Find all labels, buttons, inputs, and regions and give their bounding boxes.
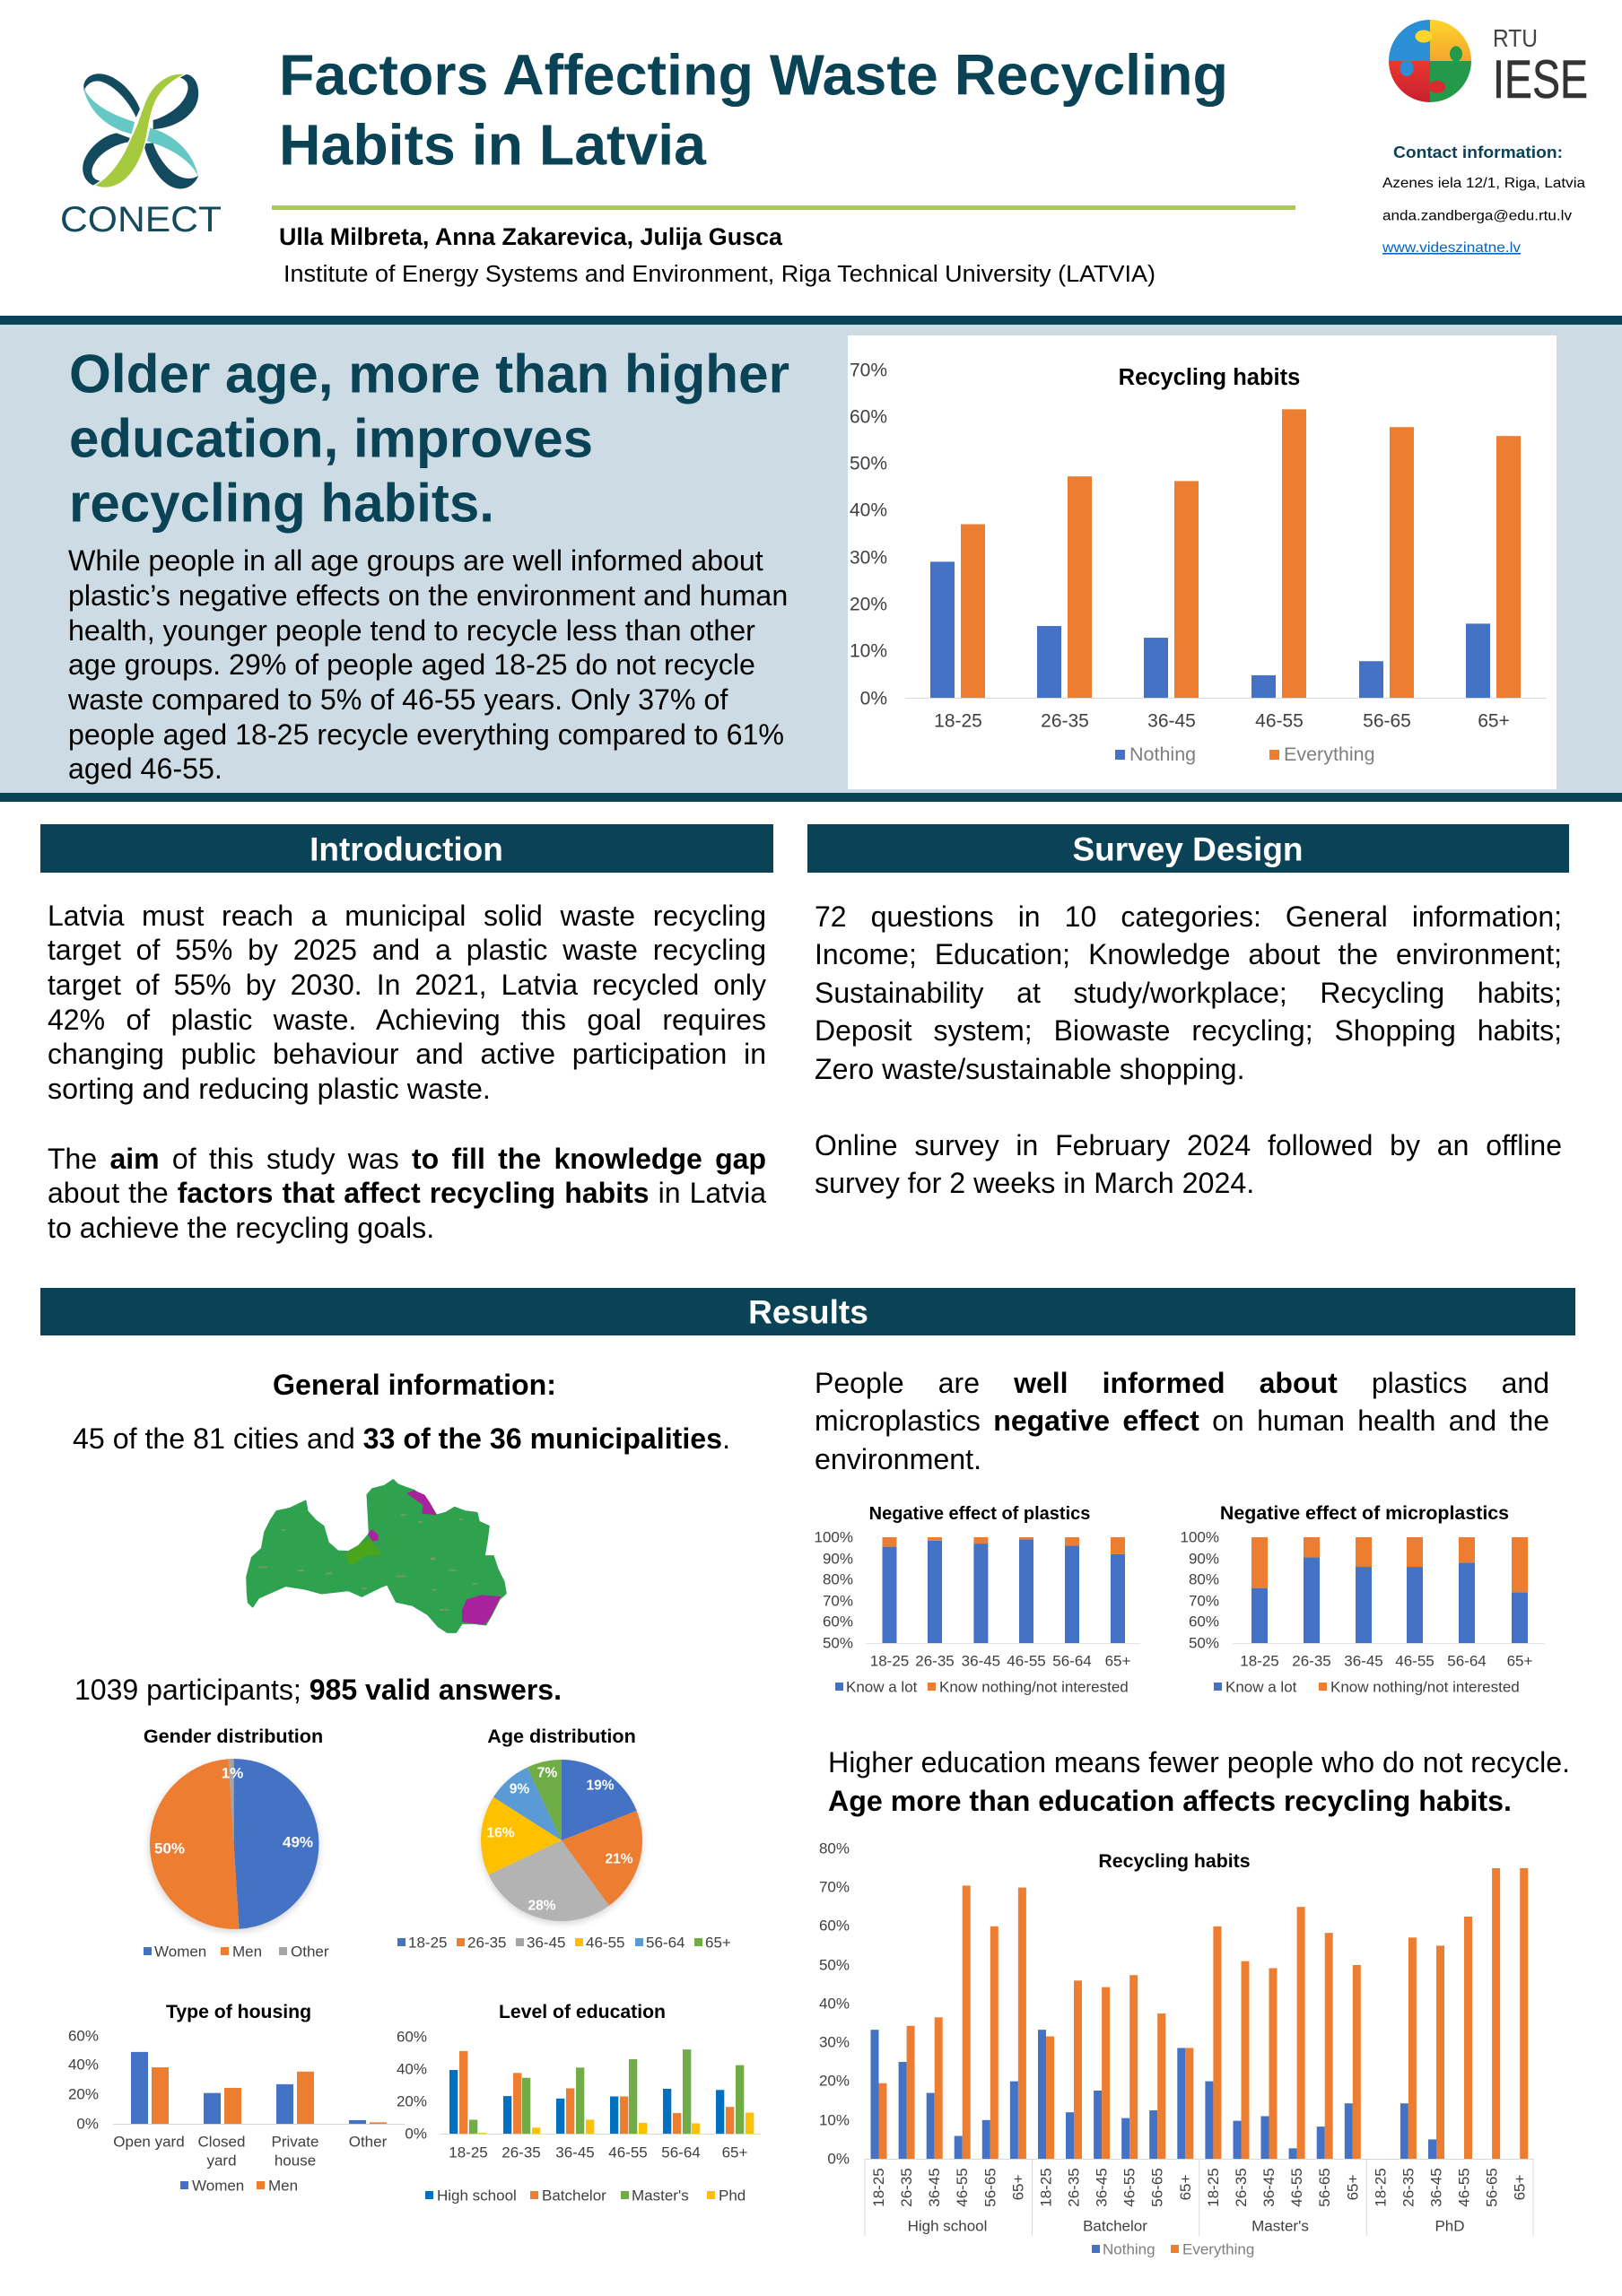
bar chart: recycling habits by education and age: 26-35 bbox=[898, 2168, 915, 2207]
bar chart: recycling habits by education and age: 18-25 bbox=[1372, 2168, 1389, 2207]
pie chart: age distribution: 21% bbox=[605, 1851, 633, 1867]
stacked bar chart: negative effect of plastics: Negative effect of plastics bbox=[869, 1504, 1090, 1524]
bar chart: type of housing: 20% bbox=[68, 2086, 99, 2102]
heading bar: Introduction bbox=[40, 824, 773, 873]
bar chart: recycling habits by education and age: 60% bbox=[819, 1918, 850, 1934]
bar chart: recycling habits by education and age: 56-65 bbox=[1484, 2168, 1501, 2207]
bar chart: recycling habits by education and age: 56-65 bbox=[1316, 2168, 1333, 2207]
awareness statement: microplastics negative effect on human health and the bbox=[815, 1405, 1549, 1437]
heading bar: Introduction: Introduction bbox=[310, 831, 503, 868]
stacked bar chart: negative effect of plastics: Know a lot bbox=[846, 1679, 918, 1695]
stacked bar chart: negative effect of plastics: 46-55 bbox=[1007, 1652, 1046, 1670]
map of Latvia bbox=[247, 1480, 506, 1632]
stacked bar chart: negative effect of plastics: 70% bbox=[823, 1593, 853, 1609]
CONECT logo: CONECT bbox=[60, 200, 222, 239]
bar chart: level of education: 36-45 bbox=[555, 2144, 595, 2161]
introduction paragraph one bbox=[48, 900, 766, 1105]
key finding body text: waste compared to 5% of 46-55 years. Only 37% of bbox=[68, 683, 728, 716]
bar chart: recycling habits by education and age bbox=[819, 1840, 1533, 2258]
key finding body text bbox=[68, 544, 788, 785]
participants statement: 1039 participants; 985 valid answers. bbox=[74, 1674, 562, 1706]
chart: recycling habits by age: Nothing bbox=[1129, 744, 1196, 765]
chart: recycling habits by age: 56-65 bbox=[1363, 710, 1411, 732]
bar chart: type of housing: Private bbox=[272, 2133, 318, 2151]
awareness statement: environment. bbox=[815, 1443, 981, 1475]
survey design categories: Sustainability at study/workplace; Recycling habits; bbox=[815, 977, 1562, 1009]
heading bar: Survey Design: Survey Design bbox=[1072, 831, 1304, 868]
education statement bbox=[828, 1746, 1570, 1817]
stacked bar chart: negative effect of plastics: 26-35 bbox=[915, 1652, 955, 1670]
stacked bar chart: negative effect of plastics: 36-45 bbox=[962, 1652, 1000, 1670]
chart: recycling habits by age: Everything bbox=[1284, 744, 1375, 765]
survey design timing: Online survey in February 2024 followed by an offline bbox=[815, 1129, 1562, 1161]
education statement: Higher education means fewer people who do not recycle. bbox=[828, 1746, 1570, 1779]
bar chart: recycling habits by education and age: 80% bbox=[819, 1840, 850, 1857]
pie chart: age distribution bbox=[397, 1725, 731, 1952]
bar chart: level of education bbox=[397, 2002, 761, 2205]
pie chart: gender distribution bbox=[144, 1725, 329, 1961]
bar chart: type of housing: Closed bbox=[198, 2133, 245, 2151]
bar chart: recycling habits by education and age: 40% bbox=[819, 1995, 850, 2013]
pie chart: age distribution: Age distribution bbox=[487, 1725, 636, 1747]
pie chart: age distribution: 36-45 bbox=[527, 1934, 565, 1952]
heading bar: Survey Design bbox=[807, 824, 1569, 873]
bar chart: recycling habits by education and age: 18-25 bbox=[1205, 2168, 1222, 2207]
chart: recycling habits by age: 60% bbox=[850, 407, 887, 427]
bar chart: recycling habits by education and age: 26-35 bbox=[1066, 2168, 1082, 2207]
chart: recycling habits by age: 70% bbox=[850, 361, 887, 380]
pie chart: age distribution: 7% bbox=[537, 1765, 557, 1781]
bar chart: level of education: Phd bbox=[719, 2187, 746, 2205]
introduction paragraph one: changing public behaviour and active participation in bbox=[48, 1038, 766, 1070]
introduction paragraph one: sorting and reducing plastic waste. bbox=[48, 1073, 491, 1105]
bar chart: type of housing: Men bbox=[268, 2178, 298, 2194]
key finding heading bbox=[69, 344, 789, 533]
bar chart: recycling habits by education and age: Recycling habits bbox=[1098, 1850, 1251, 1872]
survey design categories bbox=[815, 900, 1562, 1085]
bar chart: recycling habits by education and age: 65+ bbox=[1009, 2175, 1026, 2200]
stacked bar chart: negative effect of microplastics: 90% bbox=[1189, 1550, 1219, 1568]
bar chart: level of education: 46-55 bbox=[608, 2144, 648, 2161]
introduction aim paragraph: The aim of this study was to fill the knowledge gap bbox=[48, 1143, 766, 1175]
authors: Ulla Milbreta, Anna Zakarevica, Julija Gusca bbox=[279, 223, 783, 250]
pie chart: age distribution: 19% bbox=[586, 1778, 615, 1794]
introduction paragraph one: Latvia must reach a municipal solid waste recycling bbox=[48, 900, 766, 932]
key finding heading: recycling habits. bbox=[69, 474, 494, 533]
introduction aim paragraph: about the factors that affect recycling habits in Latvia bbox=[48, 1177, 766, 1209]
RTU IESE logo: RTU bbox=[1493, 24, 1538, 52]
bar chart: recycling habits by education and age: 36-45 bbox=[1428, 2168, 1444, 2207]
CONECT logo bbox=[60, 74, 222, 239]
chart: recycling habits by age: 36-45 bbox=[1147, 710, 1196, 732]
survey design timing bbox=[815, 1129, 1562, 1199]
bar chart: recycling habits by education and age: 46-55 bbox=[1288, 2168, 1305, 2207]
stacked bar chart: negative effect of plastics: 65+ bbox=[1105, 1652, 1130, 1670]
affiliation: Institute of Energy Systems and Environment, Riga Technical University (LATVIA) bbox=[283, 262, 1155, 287]
bar chart: level of education: 56-64 bbox=[661, 2144, 701, 2161]
bar chart: recycling habits by education and age: 26-35 bbox=[1233, 2168, 1250, 2207]
bar chart: recycling habits by education and age: 46-55 bbox=[1121, 2168, 1138, 2207]
survey design categories: Income; Education; Knowledge about the environment; bbox=[815, 938, 1562, 970]
introduction paragraph one: target of 55% by 2025 and a plastic waste recycling bbox=[48, 934, 766, 966]
stacked bar chart: negative effect of microplastics bbox=[1181, 1502, 1545, 1695]
bar chart: type of housing: 0% bbox=[76, 2115, 99, 2133]
bar chart: recycling habits by education and age: 26-35 bbox=[1400, 2168, 1417, 2207]
chart: recycling habits by age: 10% bbox=[850, 640, 887, 662]
stacked bar chart: negative effect of plastics: 18-25 bbox=[870, 1652, 909, 1670]
bar chart: recycling habits by education and age: 46-55 bbox=[1455, 2168, 1473, 2207]
stacked bar chart: negative effect of plastics: 50% bbox=[823, 1634, 853, 1652]
chart: recycling habits by age: 26-35 bbox=[1041, 710, 1089, 732]
chart: recycling habits by age bbox=[848, 335, 1557, 789]
chart: recycling habits by age: 0% bbox=[860, 689, 887, 709]
pie chart: age distribution: 28% bbox=[528, 1898, 556, 1914]
bar chart: level of education: Batchelor bbox=[542, 2187, 606, 2205]
awareness statement: People are well informed about plastics and bbox=[815, 1367, 1549, 1399]
bar chart: recycling habits by education and age: 56-65 bbox=[981, 2168, 998, 2207]
survey design categories: Deposit system; Biowaste recycling; Shopping habits; bbox=[815, 1014, 1562, 1047]
stacked bar chart: negative effect of microplastics: 80% bbox=[1189, 1571, 1219, 1587]
bar chart: recycling habits by education and age: 20% bbox=[819, 2072, 850, 2090]
heading bar: Results: Results bbox=[748, 1293, 868, 1331]
general information heading: General information: bbox=[273, 1369, 556, 1401]
bar chart: level of education: 65+ bbox=[722, 2144, 747, 2161]
chart: recycling habits by age: 50% bbox=[850, 454, 887, 474]
stacked bar chart: negative effect of microplastics: 70% bbox=[1189, 1593, 1219, 1609]
stacked bar chart: negative effect of microplastics: 56-64 bbox=[1447, 1652, 1487, 1670]
bar chart: type of housing: 60% bbox=[68, 2027, 99, 2045]
bar chart: level of education: 26-35 bbox=[501, 2144, 541, 2161]
stacked bar chart: negative effect of microplastics: Know nothing/not interested bbox=[1330, 1679, 1520, 1695]
heading bar: Results bbox=[40, 1288, 1575, 1335]
stacked bar chart: negative effect of microplastics: 18-25 bbox=[1240, 1652, 1279, 1670]
bar chart: level of education: Master's bbox=[632, 2187, 689, 2205]
pie chart: age distribution: 56-64 bbox=[646, 1934, 685, 1952]
pie chart: age distribution: 46-55 bbox=[586, 1934, 624, 1952]
key finding body text: plastic’s negative effects on the environment and human bbox=[68, 579, 788, 612]
key finding body text: aged 46-55. bbox=[68, 752, 222, 785]
stacked bar chart: negative effect of microplastics: 100% bbox=[1181, 1528, 1219, 1546]
bar chart: recycling habits by education and age: 50% bbox=[819, 1957, 850, 1973]
stacked bar chart: negative effect of plastics: 80% bbox=[823, 1571, 853, 1587]
pie chart: gender distribution: Men bbox=[232, 1943, 262, 1961]
stacked bar chart: negative effect of microplastics: 50% bbox=[1189, 1634, 1219, 1652]
contact information: www.videszinatne.lv bbox=[1382, 240, 1521, 256]
survey design timing: survey for 2 weeks in March 2024. bbox=[815, 1167, 1254, 1199]
pie chart: gender distribution: 1% bbox=[222, 1765, 243, 1781]
bar chart: recycling habits by education and age: PhD bbox=[1435, 2217, 1465, 2235]
bar chart: recycling habits by education and age: 18-25 bbox=[1037, 2168, 1055, 2207]
stacked bar chart: negative effect of plastics: 60% bbox=[823, 1613, 853, 1631]
bar chart: level of education: Level of education bbox=[499, 2002, 666, 2022]
bar chart: recycling habits by education and age: 65+ bbox=[1512, 2175, 1529, 2200]
title bbox=[279, 43, 1228, 178]
pie chart: age distribution: 65+ bbox=[705, 1934, 731, 1952]
pie chart: age distribution: 16% bbox=[486, 1826, 515, 1840]
stacked bar chart: negative effect of plastics: 56-64 bbox=[1052, 1652, 1092, 1670]
pie chart: age distribution: 18-25 bbox=[408, 1934, 447, 1952]
bar chart: level of education: 0% bbox=[405, 2126, 427, 2142]
bar chart: level of education: 18-25 bbox=[449, 2144, 488, 2161]
education statement: Age more than education affects recycling habits. bbox=[828, 1785, 1512, 1817]
bar chart: recycling habits by education and age: 56-65 bbox=[1149, 2168, 1166, 2207]
stacked bar chart: negative effect of microplastics: 65+ bbox=[1507, 1652, 1532, 1670]
bar chart: recycling habits by education and age: 46-55 bbox=[954, 2168, 971, 2207]
chart: recycling habits by age: 46-55 bbox=[1255, 710, 1304, 732]
bar chart: type of housing: house bbox=[275, 2152, 316, 2169]
cities and municipalities statement: 45 of the 81 cities and 33 of the 36 municipalities. bbox=[73, 1422, 730, 1455]
bar chart: recycling habits by education and age: 18-25 bbox=[870, 2168, 887, 2207]
key finding body text: age groups. 29% of people aged 18-25 do not recycle bbox=[68, 648, 755, 681]
stacked bar chart: negative effect of plastics bbox=[815, 1504, 1140, 1695]
bar chart: recycling habits by education and age: 65+ bbox=[1177, 2175, 1194, 2200]
key finding body text: people aged 18-25 recycle everything compared to 61% bbox=[68, 718, 784, 751]
pie chart: gender distribution: 50% bbox=[154, 1840, 185, 1857]
chart: recycling habits by age: 30% bbox=[850, 547, 887, 569]
chart: recycling habits by age: 65+ bbox=[1478, 710, 1510, 732]
bar chart: type of housing: 40% bbox=[68, 2056, 99, 2074]
pie chart: age distribution: 26-35 bbox=[467, 1934, 506, 1952]
stacked bar chart: negative effect of plastics: 100% bbox=[815, 1528, 853, 1546]
introduction paragraph one: 42% of plastic waste. Achieving this goal requires bbox=[48, 1004, 766, 1036]
contact information: Contact information: bbox=[1393, 143, 1563, 161]
chart: recycling habits by age: 18-25 bbox=[934, 710, 982, 732]
bar chart: recycling habits by education and age: Batchelor bbox=[1083, 2217, 1147, 2235]
key finding body text: health, younger people tend to recycle less than other bbox=[68, 614, 755, 647]
chart: recycling habits by age: Recycling habits bbox=[1119, 365, 1300, 390]
bar chart: type of housing: yard bbox=[206, 2152, 237, 2169]
title: Habits in Latvia bbox=[279, 113, 706, 178]
awareness statement bbox=[815, 1367, 1549, 1475]
stacked bar chart: negative effect of plastics: 90% bbox=[823, 1550, 853, 1568]
survey design categories: Zero waste/sustainable shopping. bbox=[815, 1053, 1245, 1085]
contact information: anda.zandberga@edu.rtu.lv bbox=[1382, 208, 1572, 224]
key finding background band bbox=[0, 316, 1622, 802]
RTU IESE logo: IESE bbox=[1493, 49, 1588, 109]
bar chart: type of housing: Other bbox=[349, 2133, 388, 2151]
pie chart: gender distribution: Other bbox=[291, 1943, 329, 1961]
bar chart: level of education: 40% bbox=[397, 2061, 427, 2077]
key finding body text: While people in all age groups are well informed about bbox=[68, 544, 763, 577]
contact information bbox=[1382, 143, 1585, 256]
bar chart: level of education: High school bbox=[437, 2187, 517, 2205]
bar chart: level of education: 20% bbox=[397, 2093, 427, 2109]
introduction aim paragraph bbox=[48, 1143, 766, 1244]
stacked bar chart: negative effect of microplastics: 60% bbox=[1189, 1613, 1219, 1631]
pie chart: gender distribution: 49% bbox=[283, 1833, 313, 1851]
bar chart: type of housing: Open yard bbox=[113, 2133, 185, 2151]
bar chart: recycling habits by education and age: 70% bbox=[819, 1878, 850, 1896]
title: Factors Affecting Waste Recycling bbox=[279, 43, 1228, 108]
introduction paragraph one: target of 55% by 2030. In 2021, Latvia recycled only bbox=[48, 969, 766, 1001]
contact information: Azenes iela 12/1, Riga, Latvia bbox=[1382, 176, 1585, 191]
bar chart: type of housing: Type of housing bbox=[166, 2002, 311, 2022]
RTU IESE logo bbox=[1389, 20, 1588, 109]
bar chart: type of housing bbox=[68, 2002, 405, 2194]
stacked bar chart: negative effect of plastics: Know nothing/not interested bbox=[939, 1679, 1129, 1695]
bar chart: recycling habits by education and age: Everything bbox=[1182, 2240, 1254, 2258]
bar chart: recycling habits by education and age: High school bbox=[908, 2217, 987, 2235]
bar chart: recycling habits by education and age: 10% bbox=[819, 2111, 850, 2129]
bar chart: recycling habits by education and age: Nothing bbox=[1103, 2240, 1155, 2258]
introduction aim paragraph: to achieve the recycling goals. bbox=[48, 1212, 434, 1244]
pie chart: gender distribution: Gender distribution bbox=[144, 1725, 323, 1747]
stacked bar chart: negative effect of microplastics: Negative effect of microplastics bbox=[1220, 1502, 1509, 1524]
bar chart: recycling habits by education and age: 30% bbox=[819, 2034, 850, 2050]
key finding heading: education, improves bbox=[69, 409, 593, 468]
bar chart: recycling habits by education and age: 65+ bbox=[1344, 2175, 1361, 2200]
pie chart: gender distribution: Women bbox=[154, 1943, 206, 1961]
key finding heading: Older age, more than higher bbox=[69, 344, 789, 404]
bar chart: type of housing: Women bbox=[192, 2178, 244, 2194]
bar chart: level of education: 60% bbox=[397, 2029, 427, 2045]
bar chart: recycling habits by education and age: 36-45 bbox=[926, 2168, 943, 2207]
survey design categories: 72 questions in 10 categories: General information; bbox=[815, 900, 1562, 933]
bar chart: recycling habits by education and age: 36-45 bbox=[1094, 2168, 1111, 2207]
pie chart: age distribution: 9% bbox=[510, 1781, 529, 1797]
bar chart: recycling habits by education and age: 36-45 bbox=[1260, 2168, 1278, 2207]
stacked bar chart: negative effect of microplastics: Know a lot bbox=[1225, 1679, 1297, 1695]
bar chart: recycling habits by education and age: 0% bbox=[827, 2151, 850, 2167]
bar chart: recycling habits by education and age: Master's bbox=[1251, 2217, 1309, 2235]
stacked bar chart: negative effect of microplastics: 26-35 bbox=[1292, 1652, 1331, 1670]
chart: recycling habits by age: 40% bbox=[850, 500, 887, 520]
chart: recycling habits by age: 20% bbox=[850, 594, 887, 615]
stacked bar chart: negative effect of microplastics: 36-45 bbox=[1344, 1652, 1383, 1670]
stacked bar chart: negative effect of microplastics: 46-55 bbox=[1395, 1652, 1435, 1670]
